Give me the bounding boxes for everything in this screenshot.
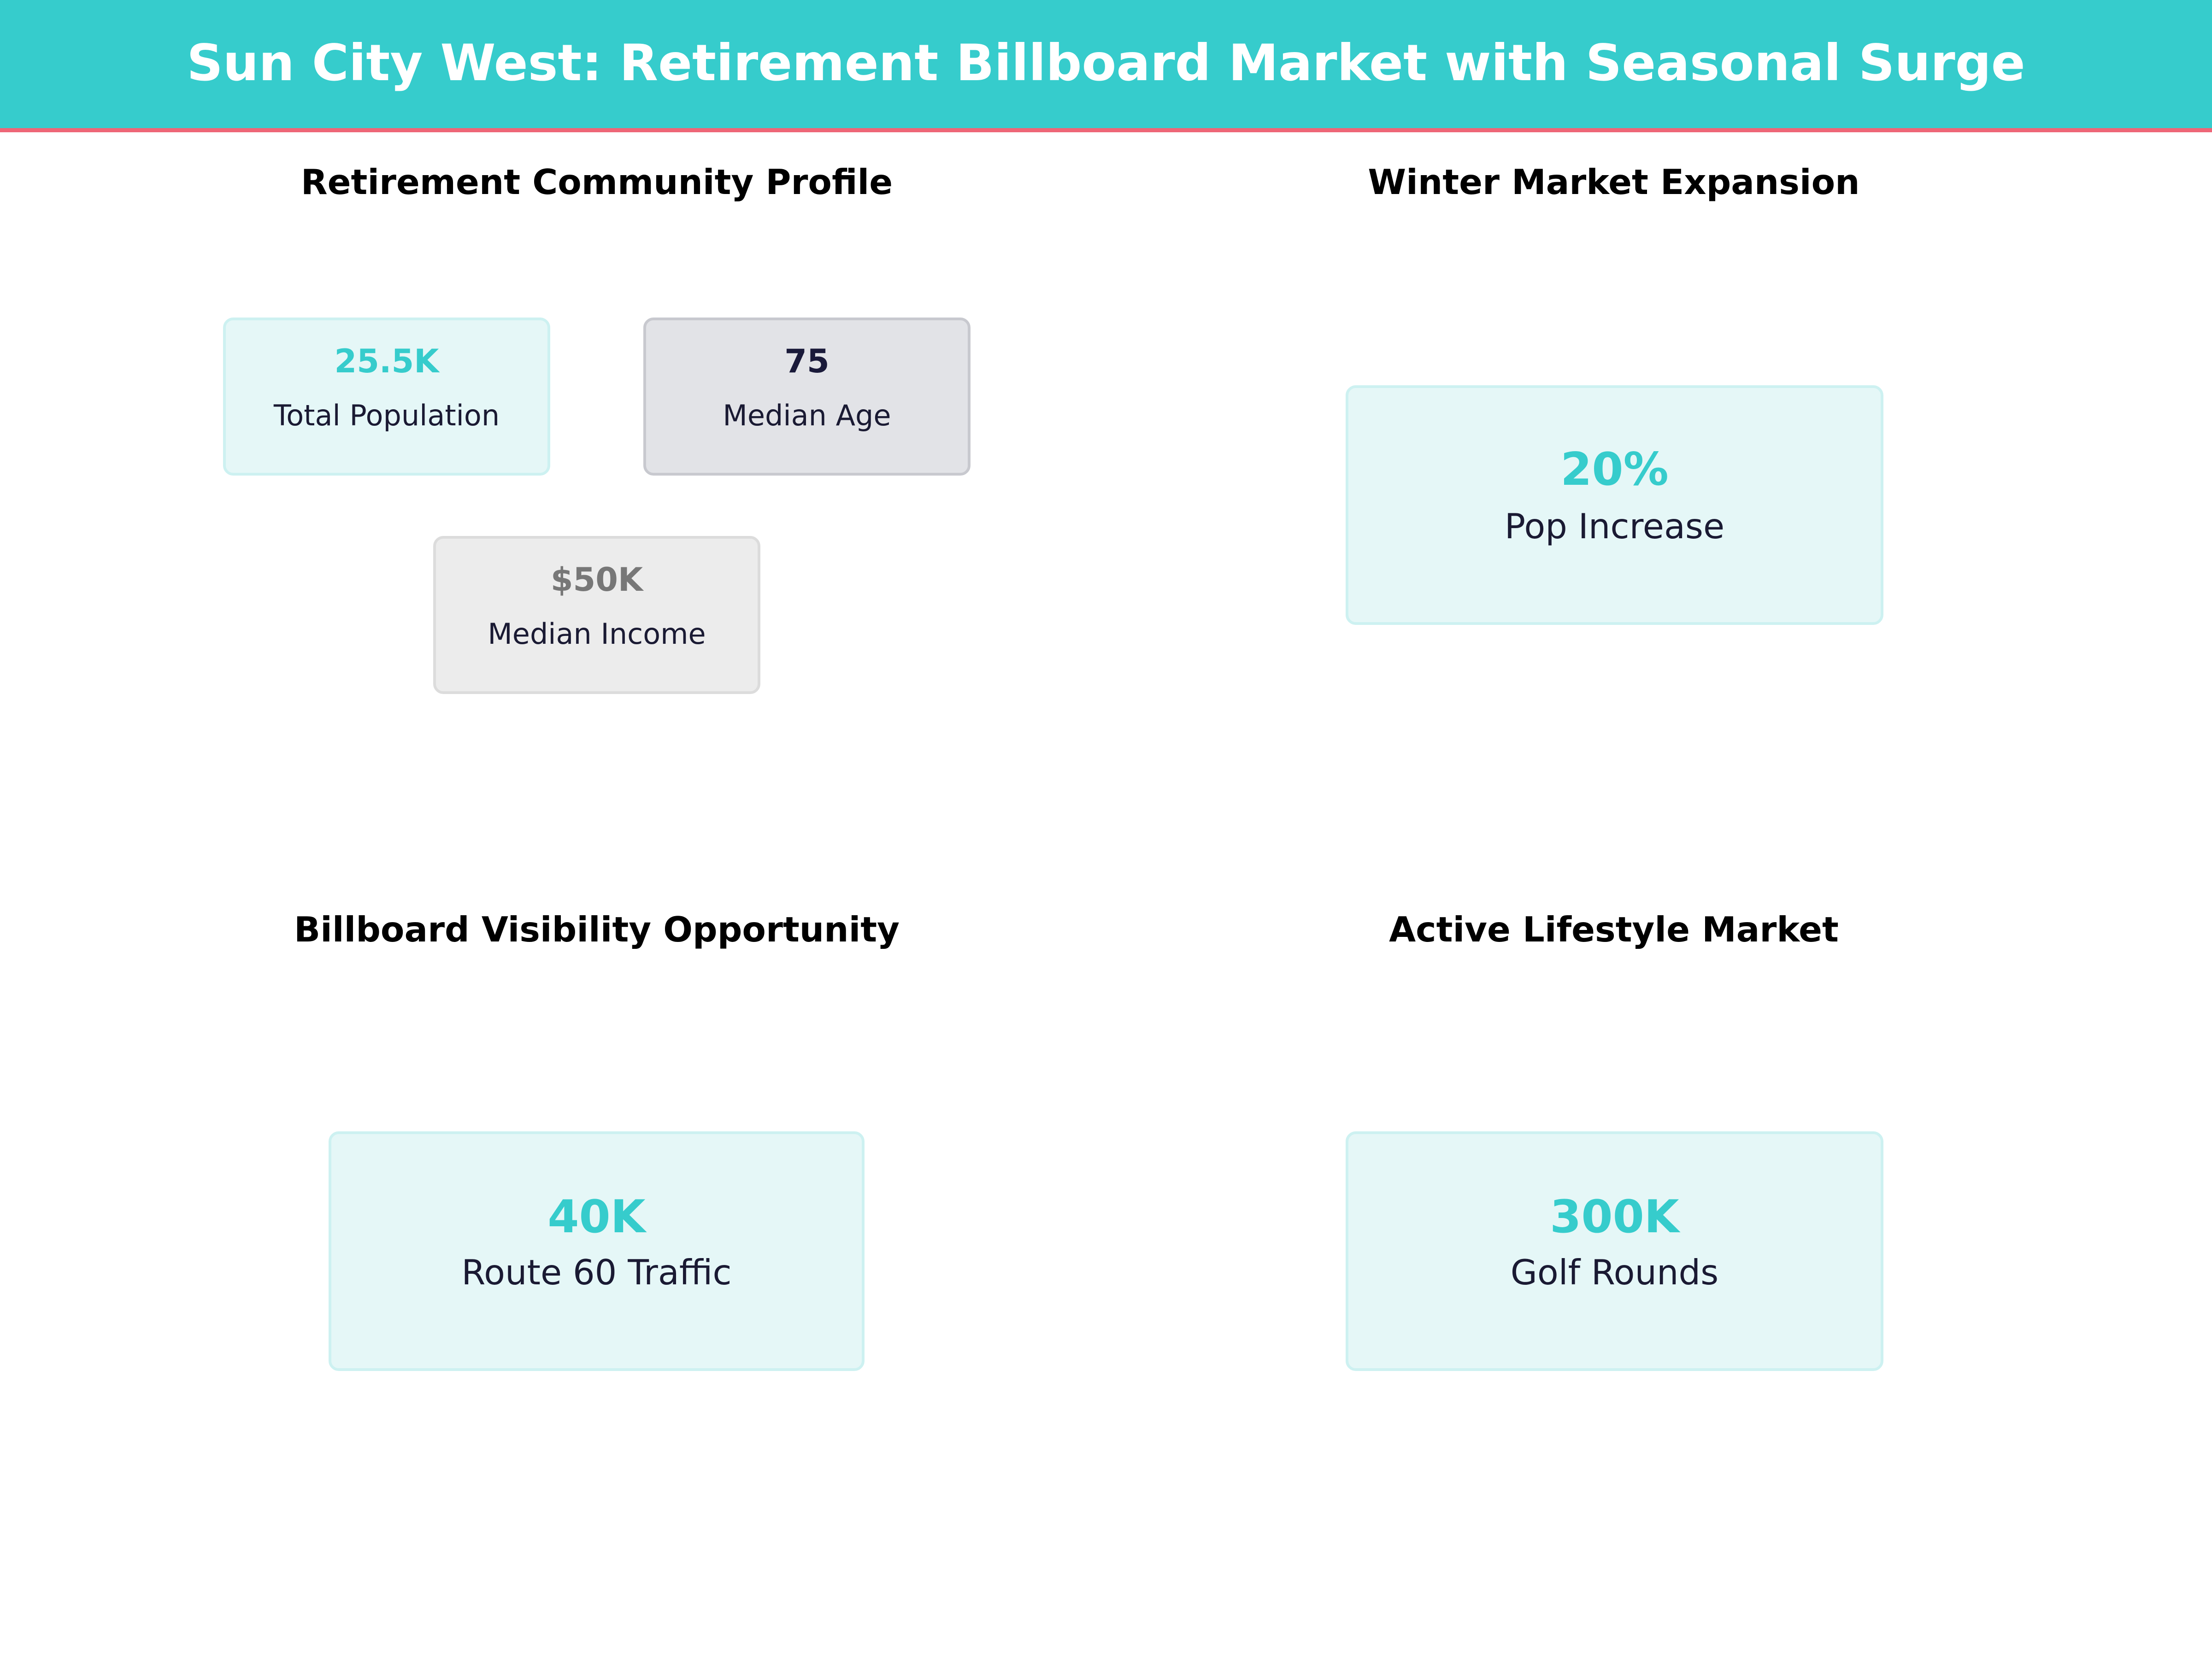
card: golf rounds: 300K <box>1550 1191 1679 1243</box>
card: golf rounds <box>1346 1131 1883 1371</box>
card: route 60 traffic: 40K <box>547 1191 646 1243</box>
card: median income: Median Income <box>488 617 706 651</box>
heading: Retirement Community Profile: Retirement Community Profile <box>301 162 893 202</box>
card: median age: 75 <box>784 342 830 380</box>
card: pop increase: Pop Increase <box>1505 506 1724 547</box>
card: total population <box>223 318 550 476</box>
heading: Active Lifestyle Market: Active Lifestyle Market <box>1389 909 1839 950</box>
card: median income: $50K <box>551 561 643 599</box>
card: total population: 25.5K <box>335 342 439 380</box>
title: Sun City West: Retirement Billboard Market with Seasonal Surge <box>187 34 2025 92</box>
heading: Winter Market Expansion: Winter Market Expansion <box>1368 162 1860 202</box>
card: median income <box>433 536 760 694</box>
card: median age <box>643 318 971 476</box>
card: route 60 traffic: Route 60 Traffic <box>461 1252 732 1293</box>
header banner <box>0 0 2212 132</box>
card: median age: Median Age <box>723 399 891 432</box>
card: pop increase <box>1346 385 1883 625</box>
card: total population: Total Population <box>274 399 500 432</box>
heading: Billboard Visibility Opportunity: Billboard Visibility Opportunity <box>294 909 900 950</box>
card: golf rounds: Golf Rounds <box>1511 1252 1718 1293</box>
card: pop increase: 20% <box>1560 443 1669 496</box>
card: route 60 traffic <box>329 1131 865 1371</box>
